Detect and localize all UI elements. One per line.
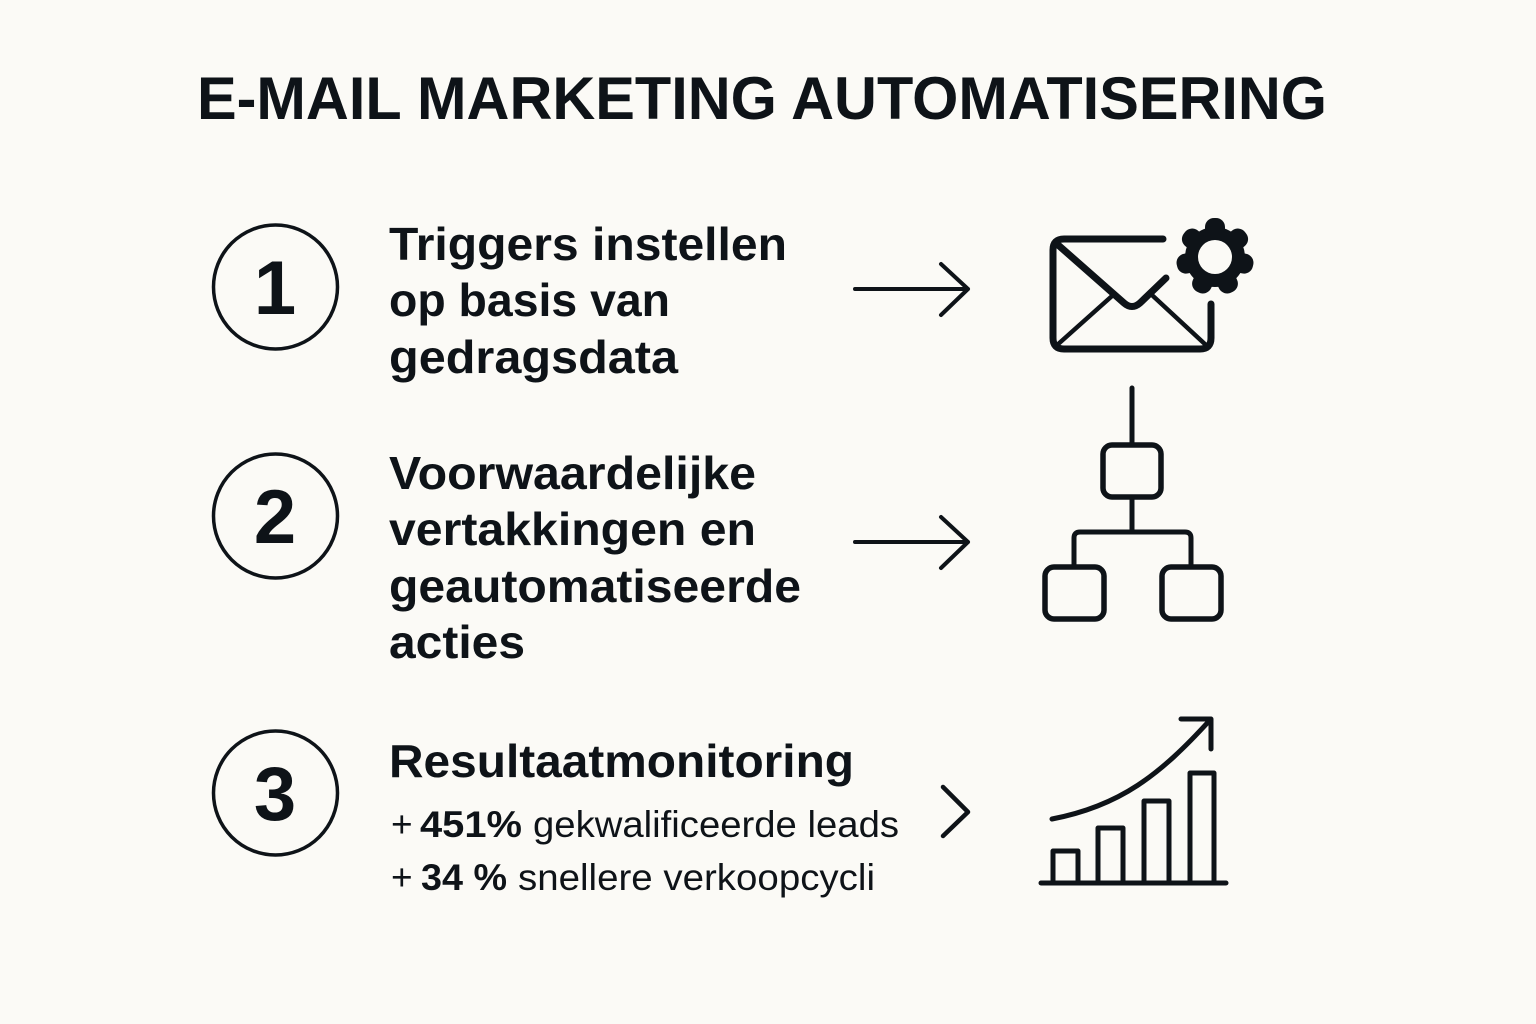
number badge 3 <box>214 731 338 855</box>
step 2 <box>214 388 1221 668</box>
step 3 text: snellere verkoopcycli <box>518 857 875 898</box>
icon: envelope with gear <box>1053 218 1255 349</box>
step 1 text: gedragsdata <box>389 331 678 383</box>
step 3 text: 34 % <box>421 857 507 898</box>
number badge 3: 3 <box>254 752 296 837</box>
step 3 text: + <box>391 857 413 898</box>
number badge 2 <box>214 454 338 578</box>
chevron arrow 3 <box>943 787 968 836</box>
arrow 2 <box>855 517 968 568</box>
step 3 text: gekwalificeerde leads <box>533 804 899 845</box>
step 2 text <box>389 447 801 668</box>
step 3 <box>214 719 1226 898</box>
step 3 text: Resultaatmonitoring <box>389 735 854 787</box>
step 1 text: op basis van <box>389 274 670 326</box>
number badge 2: 2 <box>254 475 296 560</box>
title: E-MAIL MARKETING AUTOMATISERING <box>197 65 1327 132</box>
arrow 1 <box>855 264 968 315</box>
step 2 text: geautomatiseerde <box>389 560 801 612</box>
step 2 text: vertakkingen en <box>389 503 756 555</box>
step 3 text: 451% <box>420 804 522 845</box>
icon: rising bar chart <box>1041 719 1226 883</box>
icon: branching flow diagram <box>1045 388 1221 619</box>
number badge 1: 1 <box>254 246 296 331</box>
step 1 text <box>389 218 787 383</box>
step 3 text <box>389 735 899 898</box>
step 2 text: Voorwaardelijke <box>389 447 756 499</box>
step 3 text: + <box>391 804 413 845</box>
number badge 1 <box>214 225 338 349</box>
step 2 text: acties <box>389 616 525 668</box>
step 1 text: Triggers instellen <box>389 218 787 270</box>
step 1 <box>214 218 1255 383</box>
